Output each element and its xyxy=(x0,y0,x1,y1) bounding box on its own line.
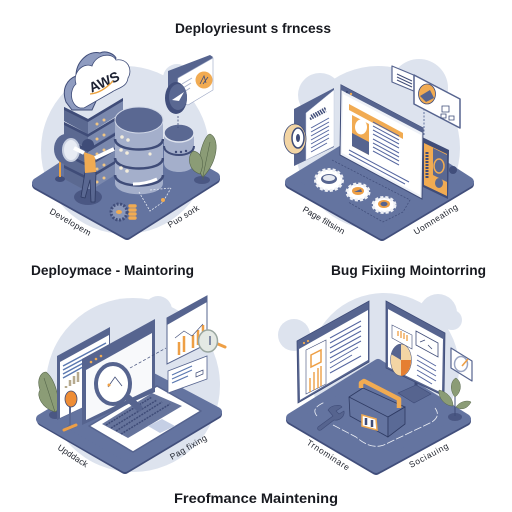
dashed route xyxy=(315,402,437,446)
plant xyxy=(189,134,216,184)
laptop base xyxy=(89,386,201,452)
right orange panel xyxy=(422,137,457,199)
label: Sociauing: Sociauing xyxy=(407,441,450,470)
laptop screen xyxy=(82,319,155,425)
right window xyxy=(386,301,445,403)
plant xyxy=(39,372,61,419)
panel: monitoring scene xyxy=(39,296,225,472)
background blob xyxy=(46,296,220,472)
small cylinder xyxy=(164,124,194,172)
gears and coins xyxy=(111,198,165,220)
gears xyxy=(316,170,395,212)
panel: maintenance scene xyxy=(278,293,472,473)
cloud AWS: AWS xyxy=(86,68,122,96)
title: Deployriesunt s frncess xyxy=(175,20,331,36)
large magnifier xyxy=(96,348,166,408)
heading: right middle: Bug Fixiing Mointorring xyxy=(331,262,486,278)
platform xyxy=(37,126,215,235)
heading: bottom: Freofmance Maintening xyxy=(174,490,338,506)
background blob xyxy=(41,64,209,234)
orange pin xyxy=(64,391,77,430)
cloud AWS xyxy=(64,52,130,110)
server rack xyxy=(64,98,123,192)
plant xyxy=(439,378,471,421)
panel: deployment scene xyxy=(37,52,216,238)
speech cards xyxy=(392,66,460,135)
heading: left middle: Deploymace - Maintoring xyxy=(31,262,194,278)
coin icon xyxy=(284,124,306,154)
chart window xyxy=(167,296,207,364)
back window xyxy=(57,327,110,420)
dashed track xyxy=(332,160,410,222)
label: Trnominare: Trnominare xyxy=(305,437,352,473)
document panel xyxy=(294,88,334,166)
wrench xyxy=(318,405,344,430)
database cylinder xyxy=(115,107,163,194)
lower card xyxy=(168,356,207,393)
platform xyxy=(41,366,217,469)
panel: page fixing scene xyxy=(284,59,469,237)
label: Pag fixing: Pag fixing xyxy=(168,432,209,462)
label: Developem: Developem xyxy=(48,206,93,238)
target badge xyxy=(451,348,472,381)
background blob xyxy=(296,59,460,230)
label: Page filtsinn: Page filtsinn xyxy=(301,204,347,236)
background blob xyxy=(278,293,462,443)
platform xyxy=(291,364,466,470)
small magnifier xyxy=(198,330,225,352)
left window xyxy=(297,301,369,403)
platform xyxy=(290,126,469,236)
toolbox xyxy=(349,381,405,437)
label: Updack: Upddack xyxy=(56,442,91,470)
label: Uomneating: Uomneating xyxy=(412,202,460,237)
main browser window xyxy=(340,85,423,199)
developer with magnifier xyxy=(54,134,114,205)
dashed connector xyxy=(139,188,171,211)
floating card xyxy=(165,55,213,128)
label: Puo sork: Puo sork xyxy=(166,202,201,230)
